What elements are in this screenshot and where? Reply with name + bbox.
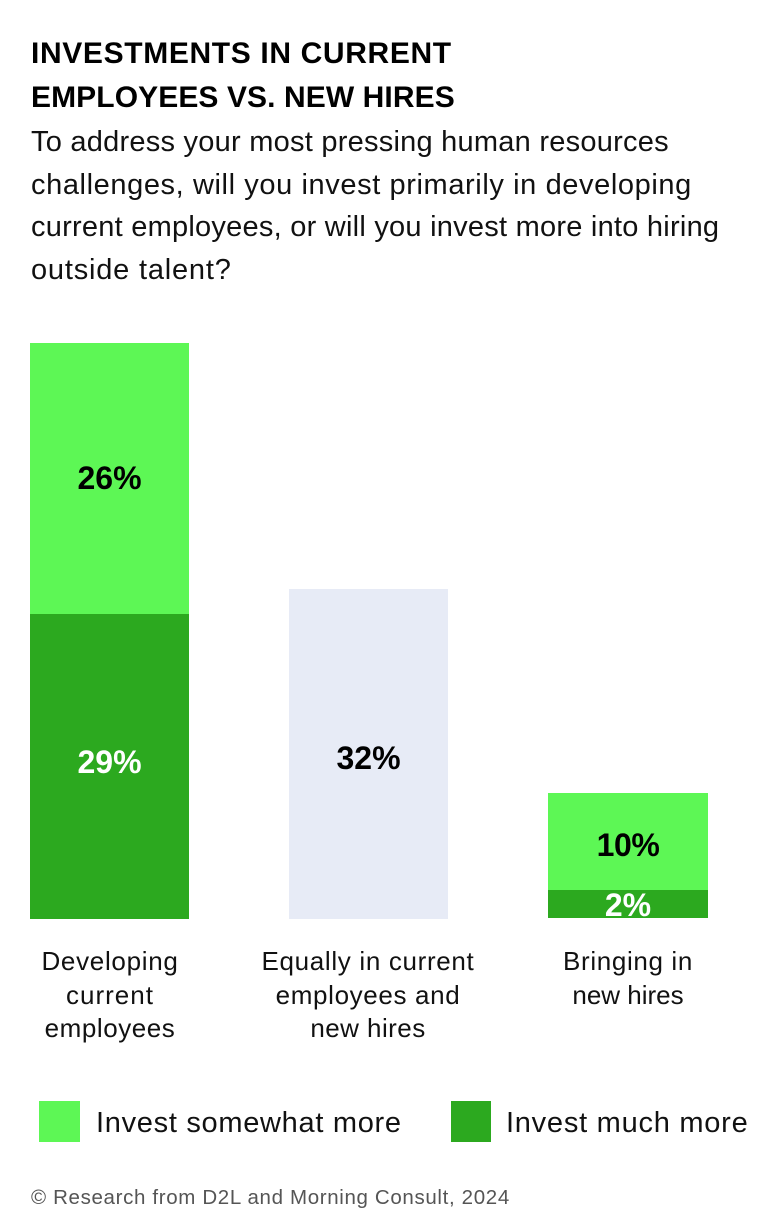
category label: equally: employees and [276,980,460,1010]
legend [39,1101,748,1142]
question text: challenges, will you invest primarily in developing [31,169,692,201]
category label: equally [262,946,474,1043]
bar: equally 32%: 32% [336,740,401,776]
segment: invest somewhat more 10% [548,793,708,890]
bar: equally 32% [289,589,448,919]
source note: © Research from D2L and Morning Consult, 2024 [31,1186,510,1209]
legend text: much more: Invest much more [506,1107,748,1139]
segment: invest somewhat more 26%: 26% [77,460,142,496]
question text: current employees, or will you invest more into hiring [31,211,719,243]
title: INVESTMENTS IN CURRENT [31,37,452,70]
title: EMPLOYEES VS. NEW HIRES [31,81,455,114]
category label: bringing: Bringing in [563,946,693,976]
category label: developing: employees [45,1013,175,1043]
question text: outside talent? [31,254,232,286]
category label: bringing [563,946,693,1010]
segment: invest much more 29%: 29% [77,744,142,780]
title [31,37,455,114]
category label: developing: Developing [41,946,179,976]
legend text: somewhat more: Invest somewhat more [96,1107,402,1139]
category label: developing [41,946,179,1043]
segment: invest much more 2% [548,890,708,918]
category label: equally: new hires [310,1013,426,1043]
category label: equally: Equally in current [262,946,474,976]
legend swatch: much more [451,1101,491,1142]
bar: bringing in new hires [548,793,708,918]
segment: invest much more 29% [30,614,189,919]
segment: invest somewhat more 10%: 10% [597,827,659,863]
segment: invest somewhat more 26% [30,343,189,614]
category label: bringing: new hires [572,980,684,1010]
category label: developing: current [66,980,154,1010]
bar: developing current employees [30,343,189,919]
question text [31,126,719,286]
legend swatch: somewhat more [39,1101,80,1142]
question text: To address your most pressing human resources [31,126,669,158]
